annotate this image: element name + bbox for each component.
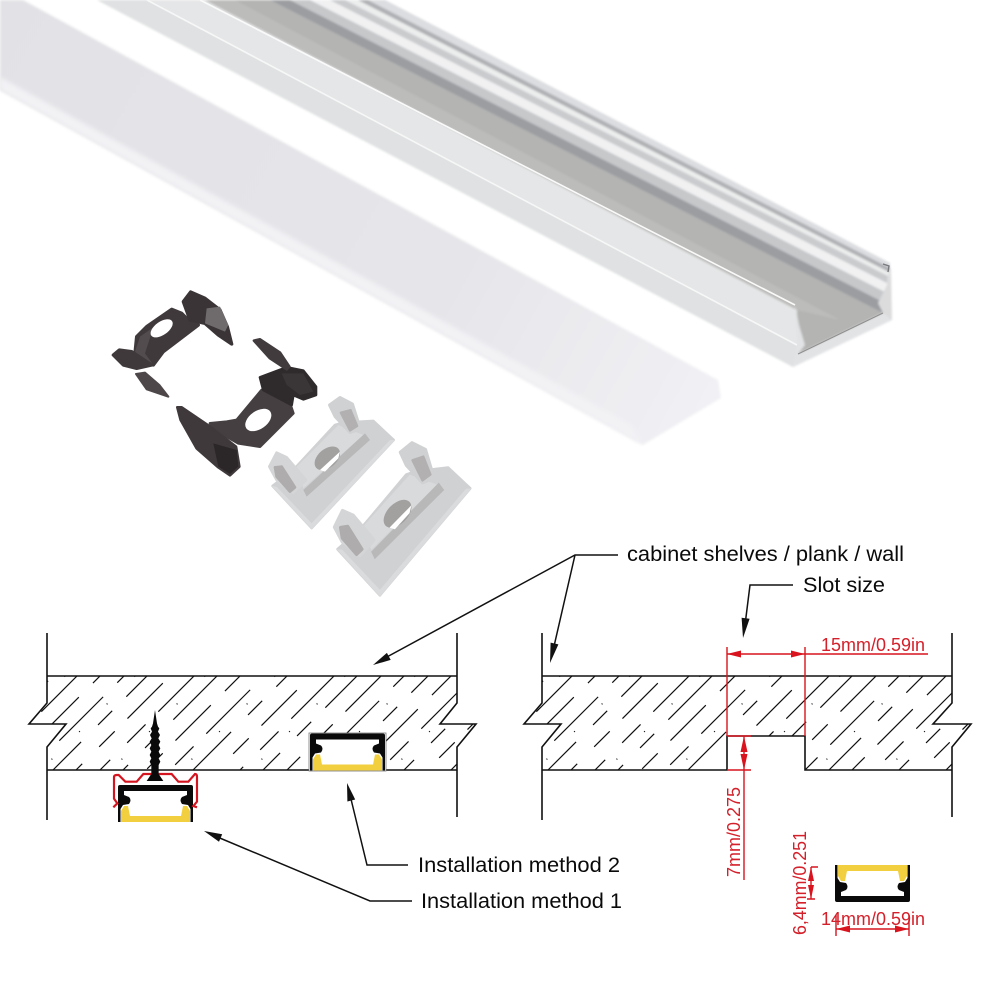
dimension: slot width 15mm [727, 634, 928, 736]
left cross-section: shelf block with hatching [27, 633, 478, 820]
profile end view with yellow diffuser [835, 865, 910, 902]
dimension: profile width 14mm: 14mm/0.59in [821, 908, 925, 929]
callout arrow: slot size [742, 585, 793, 638]
dimension: slot depth 7mm: 7mm/0.275 [723, 787, 744, 877]
metal mounting clip, upper [113, 292, 232, 397]
label: installation method 1: Installation method 1 [421, 889, 622, 913]
aluminium channel profile [97, 0, 892, 367]
label: cabinet shelves: cabinet shelves / plank / wall [627, 542, 904, 566]
label: installation method 2: Installation method 2 [418, 853, 620, 877]
installation method 2: recessed profile [309, 733, 386, 771]
frosted diffuser cover [0, 0, 721, 445]
right cross-section: shelf block with slot [522, 633, 973, 820]
installation method 1: surface mounted profile [113, 710, 197, 822]
dimension: slot depth 7mm [723, 736, 751, 880]
screw [147, 710, 163, 781]
callout arrow: installation method 1 [204, 831, 412, 901]
metal mounting clip, lower [177, 339, 316, 475]
callout arrow: installation method 2 [347, 783, 408, 865]
plastic end cap, left [269, 397, 395, 529]
plastic end cap, right [334, 439, 472, 599]
label: slot size: Slot size [803, 573, 885, 597]
red mounting clip outline [113, 774, 197, 807]
dimension: profile height 6.4mm: 6,4mm/0.251 [789, 831, 810, 935]
callout lines: cabinet shelves / plank / wall [373, 555, 618, 665]
dimension: slot width 15mm: 15mm/0.59in [821, 634, 925, 655]
